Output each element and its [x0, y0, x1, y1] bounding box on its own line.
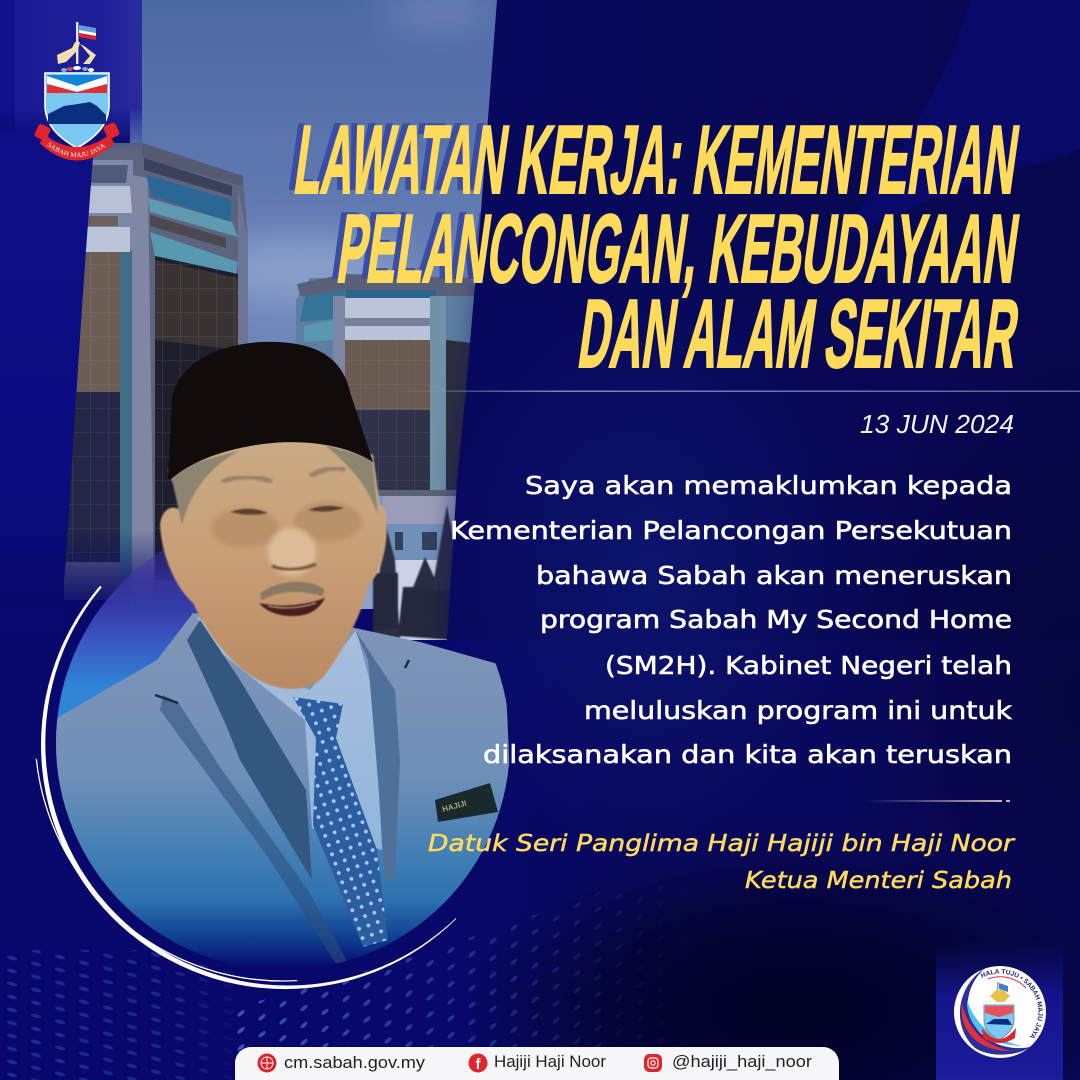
panel: navy right	[440, 0, 1080, 640]
photo: left tower	[62, 143, 248, 600]
icon: Sabah coat of arms	[34, 22, 120, 160]
quote text: bahawa Sabah akan meneruskan	[536, 561, 1012, 590]
divider	[865, 800, 1010, 802]
name badge	[435, 783, 498, 822]
hands	[57, 42, 96, 64]
facebook name: Hajiji Haji Noor	[494, 1052, 606, 1071]
head	[160, 430, 387, 689]
icon: instagram	[644, 1054, 662, 1072]
icon: facebook	[468, 1054, 488, 1073]
logo motto: HALA TUJU • SABAH MAJU JAYA	[980, 969, 1043, 1038]
panel shadow	[460, 840, 1080, 1080]
quote text	[450, 471, 1013, 769]
flag	[76, 22, 96, 64]
icon: globe	[258, 1054, 276, 1072]
songkok hat	[168, 342, 373, 480]
beads	[61, 66, 94, 72]
photo fade	[0, 530, 340, 610]
icon: facebook: f	[476, 1056, 482, 1073]
footer contact bar	[235, 1047, 839, 1080]
instagram handle: @hajiji_haji_noor	[672, 1052, 812, 1071]
lower background	[0, 640, 1080, 1080]
left edge panel	[0, 130, 95, 640]
photo: right tower	[296, 274, 500, 490]
dot wave right	[237, 885, 664, 1051]
panel glow	[430, 270, 870, 870]
portrait backdrop circle	[56, 550, 199, 810]
photo: clouds	[190, 0, 500, 300]
attribution	[428, 829, 1016, 894]
photo: sky	[130, 0, 498, 609]
icon: Hala Tuju logo	[954, 966, 1046, 1058]
photo: low building and trees	[372, 490, 465, 642]
rule	[390, 390, 1080, 392]
small crest	[982, 982, 1016, 1043]
jacket	[56, 613, 510, 966]
date: 13 JUN 2024	[860, 409, 1014, 439]
left blue strip	[0, 0, 142, 150]
ribbon	[34, 122, 120, 160]
portrait circle and man	[35, 342, 531, 1000]
shield	[45, 73, 109, 148]
quote text: dilaksanakan dan kita akan teruskan	[483, 740, 1012, 769]
website: cm.sabah.gov.my	[284, 1053, 426, 1072]
panel: logo backing	[936, 940, 1063, 1080]
panel right shade	[840, 320, 1080, 1080]
attribution: Ketua Menteri Sabah	[745, 866, 1012, 894]
title	[289, 105, 1025, 388]
motto: SABAH MAJU JAYA	[47, 142, 106, 158]
dot wave left	[7, 950, 229, 1080]
quote text: program Sabah My Second Home	[540, 605, 1012, 634]
quote text: Kementerian Pelancongan Persekutuan	[450, 516, 1012, 545]
attribution: Datuk Seri Panglima Haji Hajiji bin Haji Noor	[428, 829, 1016, 857]
decorative ring	[36, 586, 456, 990]
quote text: (SM2H). Kabinet Negeri telah	[605, 651, 1012, 680]
mountain	[48, 102, 106, 124]
quote text: Saya akan memaklumkan kepada	[525, 471, 1012, 500]
name badge: HAJIJI	[441, 799, 468, 814]
chevron	[47, 75, 107, 93]
quote text: meluluskan program ini untuk	[584, 696, 1013, 725]
title shadow	[283, 102, 1019, 300]
